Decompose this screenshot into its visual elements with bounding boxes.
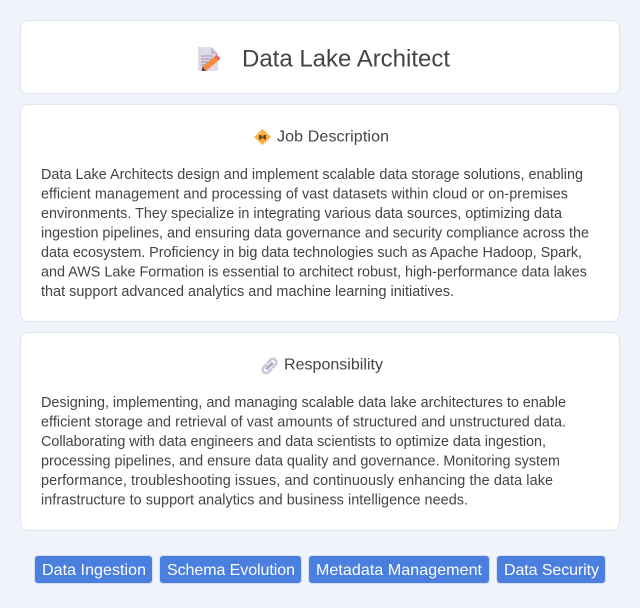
text block: job description: Data Lake Architects design and implement scalable data storage solutions, enabling <box>41 167 583 183</box>
tag: data ingestion <box>34 555 153 584</box>
text block: job description: and AWS Lake Formation is essential to architect robust, high-performance data lakes <box>41 264 587 280</box>
tag: schema evolution <box>159 555 302 584</box>
tag: schema evolution: Schema Evolution <box>167 562 295 579</box>
tag: data security <box>496 555 606 584</box>
text block: job description: environments. They specialize in integrating various data sources, optimizing data <box>41 206 562 222</box>
icon: diamond sign <box>254 129 271 145</box>
panel: job description <box>20 104 620 322</box>
text block: responsibility: Collaborating with data engineers and data scientists to optimize data ingestion, <box>41 434 546 450</box>
text block: responsibility: infrastructure to support analytics and business intelligence needs. <box>41 492 468 508</box>
text block: job description: efficient management and processing of vast datasets within cloud or on-premises <box>41 186 568 202</box>
text block: responsibility <box>41 395 566 508</box>
text block: job description: that support advanced analytics and machine learning initiatives. <box>41 284 454 300</box>
text block: job description: ingestion pipelines, and ensuring data governance and security compliance across the <box>41 226 589 242</box>
panel: title header <box>20 20 620 94</box>
tag: data ingestion: Data Ingestion <box>42 562 146 579</box>
heading: responsibility: Responsibility <box>284 356 383 374</box>
icon: chain link <box>261 358 278 374</box>
icon: document with pencil <box>198 47 220 71</box>
heading: job description: Job Description <box>277 128 389 146</box>
tag: metadata management: Metadata Management <box>316 562 483 579</box>
text block: responsibility: processing pipelines, and ensure data quality and governance. Monitoring system <box>41 454 560 470</box>
text block: responsibility: Designing, implementing, and managing scalable data lake architectures to enable <box>41 395 566 411</box>
text block: responsibility: performance, troubleshooting issues, and continuously enhancing the data lake <box>41 473 553 489</box>
tag: data security: Data Security <box>504 562 599 579</box>
panel: responsibility <box>20 332 620 531</box>
text block: responsibility: efficient storage and retrieval of vast amounts of structured and unstructured data. <box>41 414 566 430</box>
text block: job description <box>41 167 589 300</box>
text block: job description: data ecosystem. Proficiency in big data technologies such as Apache Hadoop, Spark, <box>41 245 582 261</box>
tag: metadata management <box>308 555 490 584</box>
title: Data Lake Architect <box>242 46 450 72</box>
